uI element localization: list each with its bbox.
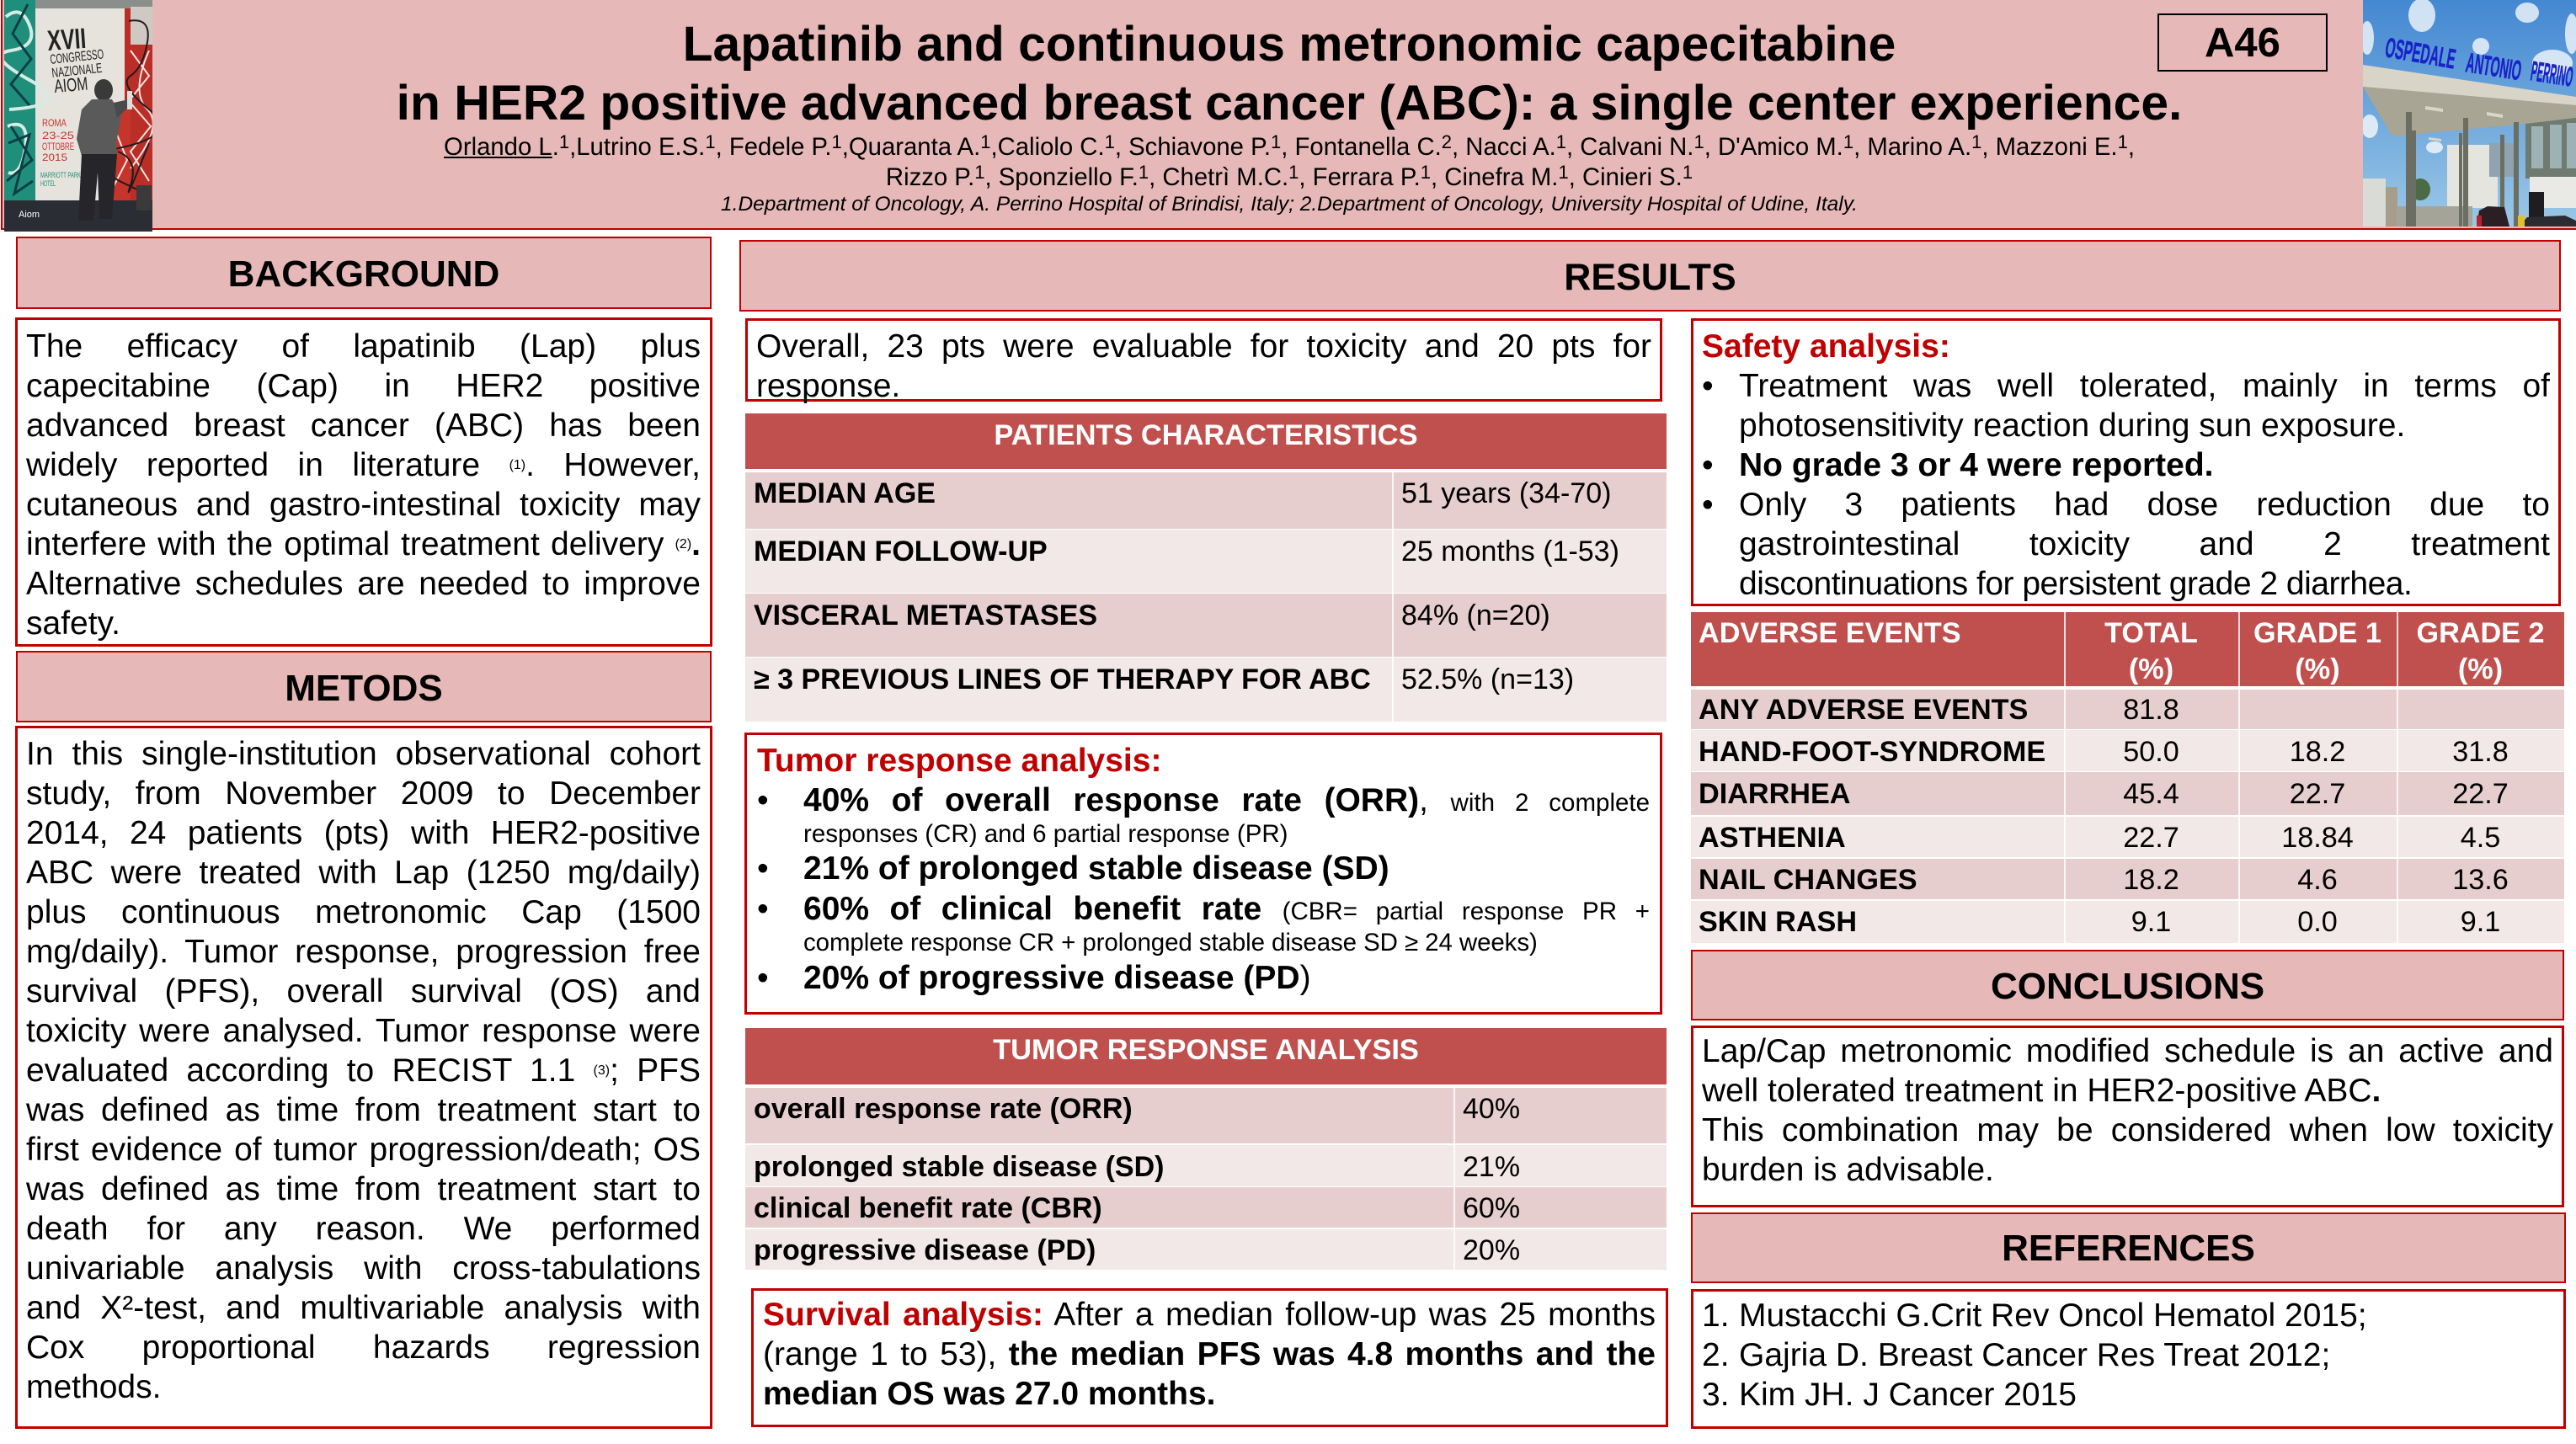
poster lettering	[19, 23, 104, 220]
text: well tolerated	[1739, 368, 2550, 444]
text: dose reduction: Only 3 patients had dose reduction due to	[1739, 487, 2550, 523]
table header	[745, 1028, 1667, 1084]
paragraph: methods: mg/daily). Tumor response, progression free	[26, 934, 701, 970]
paragraph: methods: toxicity were analysed. Tumor response were	[26, 1013, 701, 1049]
bullet: PD: •	[757, 960, 769, 996]
subheading: safety: Safety analysis:	[1702, 328, 1950, 365]
poster lettering: AIOM	[53, 73, 88, 97]
authors	[444, 131, 2135, 191]
row: diarrhea: 22.7	[2452, 778, 2509, 810]
poster number A46: A46	[2205, 20, 2280, 66]
image: hospital entrance	[2363, 0, 2576, 226]
row: diarrhea: 22.7	[2290, 778, 2345, 810]
row: hand-foot syndrome: 18.2	[2290, 736, 2345, 768]
row: PD: 20%	[1463, 1234, 1520, 1266]
paragraph: methods: ABC were treated with Lap (1250 mg/daily)	[26, 855, 701, 891]
table header: GRADE 2	[2417, 617, 2544, 649]
paragraph: conclusions: This combination may be considered when low toxicity	[1702, 1112, 2553, 1148]
paragraph: methods	[26, 736, 701, 1405]
title: in HER2 positive advanced breast cancer (ABC): a single center experience.	[397, 76, 2182, 131]
poster lettering: ROMA	[42, 117, 67, 129]
row: SD: 21%	[1463, 1151, 1520, 1183]
bullet continuation: complete response: complete response CR + prolonged stable disease SD ≥ 24 weeks)	[803, 929, 1538, 956]
row: any adverse events	[1691, 690, 2564, 729]
bullet: CBR: 60% of clinical benefit rate (CBR= partial response PR +	[803, 891, 1650, 927]
paragraph: background	[26, 328, 701, 642]
authors: Rizzo P.1, Sponziello F.1, Chetrì M.C.1, Ferrara P.1, Cinefra M.1, Cinieri S.1	[886, 162, 1693, 191]
row: any adverse events: 81.8	[2123, 694, 2179, 726]
table header: PATIENTS CHARACTERISTICS	[994, 419, 1418, 451]
panel: methods text	[15, 726, 712, 1429]
paragraph: methods: plus continuous metronomic Cap (1500	[26, 894, 701, 930]
panel: references list	[1691, 1289, 2566, 1429]
header band	[1, 0, 2576, 230]
table header	[745, 413, 1667, 469]
bullet: SD: 21% of prolonged stable disease (SD)	[803, 850, 1389, 887]
table header: TUMOR RESPONSE ANALYSIS	[993, 1034, 1419, 1066]
poster lettering: 23-25	[42, 130, 74, 141]
row: ORR: 40%	[1463, 1093, 1520, 1125]
heading: methods: METODS	[285, 667, 443, 709]
heading: methods	[16, 651, 712, 722]
poster lettering: 2015	[42, 152, 67, 163]
table header: (%)	[2458, 653, 2503, 685]
reference 3: Kim JH. J Cancer 2015	[1739, 1377, 2077, 1413]
text: evaluable patients	[756, 328, 1651, 404]
bullet: no grade 3: •	[1702, 447, 1714, 483]
row: skin rash: 0.0	[2297, 906, 2338, 938]
paragraph: conclusions: well tolerated treatment in HER2-positive ABC.	[1702, 1073, 2381, 1109]
paragraph: methods: and X²-test, and multivariable analysis with	[26, 1290, 701, 1326]
paragraph: background: advanced breast cancer (ABC) has been	[26, 408, 701, 444]
paragraph: methods: In this single-institution observational cohort	[26, 736, 701, 772]
paragraph: background: interfere with the optimal treatment delivery (2).	[26, 526, 701, 562]
heading: references: REFERENCES	[2002, 1228, 2255, 1269]
paragraph: background: capecitabine (Cap) in HER2 positive	[26, 368, 701, 404]
paragraph: background: Alternative schedules are needed to improve	[26, 566, 701, 602]
poster lettering: OTTOBRE	[42, 141, 74, 152]
text: well tolerated: Treatment was well tolerated, mainly in terms of	[1739, 368, 2550, 404]
panel: background text	[15, 317, 712, 647]
row: previous lines: 52.5% (n=13)	[1401, 663, 1574, 695]
row: skin rash: SKIN RASH	[1699, 906, 1857, 938]
row: asthenia: 4.5	[2461, 822, 2500, 854]
reference 1: Mustacchi G.Crit Rev Oncol Hematol 2015;	[1739, 1297, 2367, 1334]
row: median age: MEDIAN AGE	[754, 477, 936, 509]
bullet: ORR: •	[757, 782, 769, 818]
row: PD: progressive disease (PD)	[754, 1234, 1096, 1266]
text: dose reduction	[1739, 487, 2550, 602]
table header: (%)	[2295, 653, 2340, 685]
panel: survival analysis	[751, 1288, 1668, 1427]
row: hand-foot syndrome: 31.8	[2452, 736, 2509, 768]
row: skin rash: 9.1	[2461, 906, 2500, 938]
bullet: CBR: •	[757, 891, 769, 927]
row: diarrhea	[1691, 772, 2564, 815]
reference 2: Gajria D. Breast Cancer Res Treat 2012;	[1739, 1337, 2330, 1373]
row: CBR: 60%	[1463, 1192, 1520, 1224]
row: ORR: overall response rate (ORR)	[754, 1093, 1133, 1125]
paragraph: conclusions	[1702, 1033, 2553, 1188]
row: median follow-up: 25 months (1-53)	[1401, 536, 1619, 567]
bullet: no grade 3: No grade 3 or 4 were reported.	[1739, 447, 2214, 483]
affiliations: 1.Department of Oncology, A. Perrino Hospital of Brindisi, Italy; 2.Department of Oncology, University Hospital of Udine, Italy.	[721, 193, 1858, 216]
poster number A46	[2157, 13, 2328, 72]
poster lettering: MARRIOTT PARK	[40, 171, 81, 179]
row: SD	[745, 1145, 1667, 1186]
row: skin rash	[1691, 901, 2564, 943]
row: nail changes: 4.6	[2297, 864, 2338, 896]
text: dose reduction: discontinuations for persistent grade 2 diarrhea.	[1739, 566, 2412, 602]
bullet: well tolerated: •	[1702, 368, 1714, 404]
paragraph: methods: univariable analysis with cross-tabulations	[26, 1250, 701, 1287]
text: well tolerated: photosensitivity reaction during sun exposure.	[1739, 408, 2405, 444]
row: asthenia: ASTHENIA	[1699, 822, 1846, 854]
row: PD	[745, 1229, 1667, 1270]
heading: conclusions	[1691, 950, 2564, 1020]
panel: conclusions text	[1691, 1026, 2564, 1207]
bullet continuation: responses: responses (CR) and 6 partial response (PR)	[803, 820, 1288, 848]
paragraph: methods: was defined as time from treatment start to	[26, 1092, 701, 1128]
row: median follow-up	[745, 530, 1667, 593]
paragraph: methods: survival (PFS), overall survival (OS) and	[26, 973, 701, 1010]
paragraph: background: safety.	[26, 605, 120, 642]
text: evaluable patients: Overall, 23 pts were evaluable for toxicity and 20 pts for	[756, 328, 1651, 365]
text: survival: (range 1 to 53), the median PFS was 4.8 months and the	[763, 1336, 1656, 1372]
paragraph: conclusions: Lap/Cap metronomic modified schedule is an active and	[1702, 1033, 2553, 1069]
table: adverse events	[1691, 612, 2564, 943]
row: hand-foot syndrome	[1691, 730, 2564, 771]
row: ORR	[745, 1088, 1667, 1143]
paragraph: methods: Cox proportional hazards regression	[26, 1329, 701, 1366]
row: nail changes: 13.6	[2452, 864, 2509, 896]
bullet: dose reduction: •	[1702, 487, 1714, 523]
text: survival: median OS was 27.0 months.	[763, 1376, 1216, 1412]
reference 1: 1.	[1702, 1297, 1730, 1334]
image: congress poster	[4, 0, 152, 232]
row: nail changes: NAIL CHANGES	[1699, 864, 1917, 896]
row: nail changes	[1691, 859, 2564, 899]
authors: Orlando L.1,Lutrino E.S.1, Fedele P.1,Quaranta A.1,Caliolo C.1, Schiavone P.1, Fontanella C.2, Nacci A.1, Calvani N.1, D'Amico M.1, Marino A.1, Mazzoni E.1,	[444, 131, 2135, 161]
row: CBR: clinical benefit rate (CBR)	[754, 1192, 1102, 1224]
row: asthenia	[1691, 817, 2564, 857]
bullet: ORR: 40% of overall response rate (ORR), with 2 complete	[803, 782, 1650, 818]
table: patients characteristics	[745, 413, 1667, 722]
paragraph: methods: first evidence of tumor progression/death; OS	[26, 1132, 701, 1168]
table header	[1691, 612, 2564, 686]
row: diarrhea: 45.4	[2123, 778, 2179, 810]
row: SD: prolonged stable disease (SD)	[754, 1151, 1164, 1183]
row: median age	[745, 472, 1667, 529]
panel: safety analysis	[1691, 318, 2561, 606]
row: hand-foot syndrome: 50.0	[2123, 736, 2179, 768]
bullet: SD: •	[757, 850, 769, 887]
table header: ADVERSE EVENTS	[1699, 617, 1961, 649]
reference 3: 3.	[1702, 1377, 1730, 1413]
table header: GRADE 1	[2253, 617, 2381, 649]
hospital sign lettering: OSPEDALE	[2383, 31, 2458, 74]
row: asthenia: 18.84	[2281, 822, 2354, 854]
text: survival	[763, 1297, 1656, 1412]
text: dose reduction: gastrointestinal toxicity and 2 treatment	[1739, 526, 2550, 562]
paragraph: background: The efficacy of lapatinib (Lap) plus	[26, 328, 701, 365]
heading: results	[739, 240, 2561, 312]
row: visceral metastases	[745, 594, 1667, 657]
text: survival: Survival analysis: After a median follow-up was 25 months	[763, 1297, 1656, 1333]
title	[397, 17, 2182, 131]
title: Lapatinib and continuous metronomic capecitabine	[683, 17, 1896, 72]
heading: background	[16, 237, 712, 309]
poster lettering: Aiom	[19, 210, 40, 220]
heading: references	[1691, 1212, 2566, 1283]
panel: tumor response analysis text	[744, 733, 1662, 1015]
text: evaluable patients: response.	[756, 368, 900, 404]
row: diarrhea: DIARRHEA	[1699, 778, 1850, 810]
paragraph: methods: death for any reason. We performed	[26, 1211, 701, 1247]
paragraph: conclusions: burden is advisable.	[1702, 1152, 1994, 1188]
poster lettering: NAZIONALE	[51, 61, 103, 81]
painter figure	[77, 79, 152, 221]
paragraph: methods: methods.	[26, 1369, 161, 1405]
row: visceral metastases: VISCERAL METASTASES	[754, 599, 1097, 631]
paragraph: background: widely reported in literature (1). However,	[26, 447, 701, 483]
heading: background: BACKGROUND	[228, 253, 499, 295]
table: tumor response analysis	[745, 1028, 1667, 1270]
table header: (%)	[2129, 653, 2173, 685]
bullet: PD: 20% of progressive disease (PD)	[803, 960, 1311, 996]
row: asthenia: 22.7	[2123, 822, 2179, 854]
row: median age: 51 years (34-70)	[1401, 477, 1611, 509]
row: median follow-up: MEDIAN FOLLOW-UP	[754, 536, 1048, 567]
poster lettering: HOTEL	[40, 179, 56, 188]
row: skin rash: 9.1	[2131, 906, 2171, 938]
row: previous lines: ≥ 3 PREVIOUS LINES OF THERAPY FOR ABC	[754, 663, 1371, 695]
reference 2: 2.	[1702, 1337, 1730, 1373]
paragraph: background: cutaneous and gastro-intestinal toxicity may	[26, 487, 701, 523]
paragraph: methods: evaluated according to RECIST 1.1 (3); PFS	[26, 1052, 701, 1089]
heading: conclusions: CONCLUSIONS	[1991, 965, 2264, 1007]
poster lettering: XVII	[46, 23, 87, 57]
paragraph: methods: was defined as time from treatment start to	[26, 1171, 701, 1207]
poster lettering: CONGRESSO	[50, 47, 104, 67]
paragraph: methods: study, from November 2009 to December	[26, 775, 701, 812]
paragraph: methods: 2014, 24 patients (pts) with HER2-positive	[26, 815, 701, 851]
table header: TOTAL	[2104, 617, 2198, 649]
subheading: tumor response: Tumor response analysis:	[757, 743, 1161, 779]
row: CBR	[745, 1187, 1667, 1228]
row: previous lines	[745, 658, 1667, 722]
row: nail changes: 18.2	[2123, 864, 2179, 896]
heading: results: RESULTS	[1564, 256, 1736, 298]
panel: overall evaluable	[745, 318, 1662, 402]
row: visceral metastases: 84% (n=20)	[1401, 599, 1550, 631]
row: hand-foot syndrome: HAND-FOOT-SYNDROME	[1699, 736, 2045, 768]
row: any adverse events: ANY ADVERSE EVENTS	[1699, 694, 2028, 726]
